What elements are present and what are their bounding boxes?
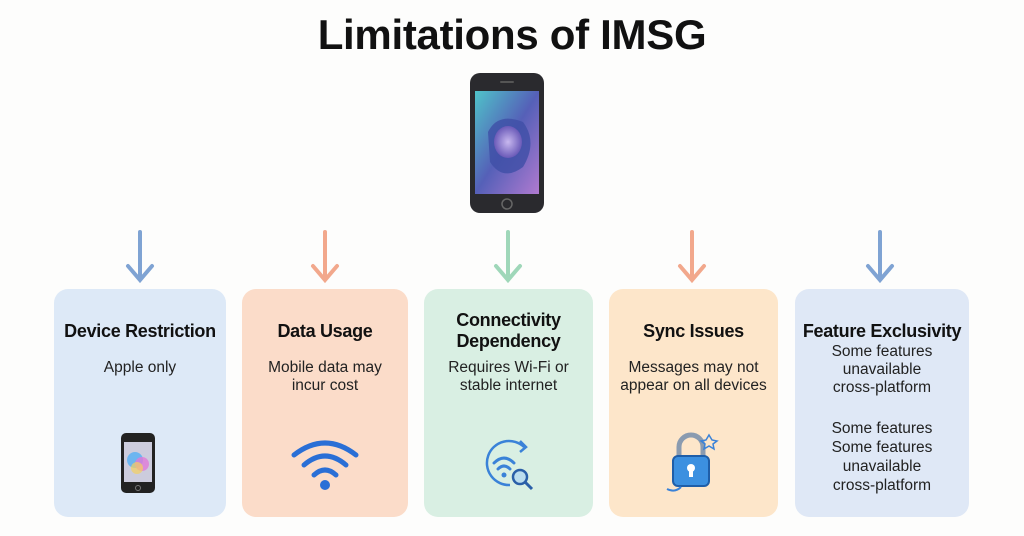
arrow 4 xyxy=(678,230,706,283)
heading: Connectivity xyxy=(456,310,561,330)
text xyxy=(832,343,932,396)
text: stable internet xyxy=(460,377,557,394)
text repeated xyxy=(832,420,932,494)
panel: sync issues xyxy=(609,289,778,517)
icon: padlock xyxy=(666,432,719,492)
heading: Device Restriction xyxy=(64,321,216,341)
panel: device restriction xyxy=(54,289,226,517)
arrow 2 xyxy=(310,230,340,283)
panel: data usage xyxy=(242,289,408,517)
text repeated: unavailable xyxy=(843,458,921,475)
heading: Sync Issues xyxy=(643,321,744,341)
text: unavailable xyxy=(843,361,921,378)
heading: Dependency xyxy=(456,331,561,351)
text: appear on all devices xyxy=(620,377,767,394)
text xyxy=(448,359,569,394)
title: Limitations of IMSG xyxy=(318,11,706,58)
heading: Data Usage xyxy=(277,321,373,341)
heading xyxy=(456,310,561,351)
icon: small phone xyxy=(121,433,155,493)
text: Mobile data may xyxy=(268,359,382,376)
arrow 5 xyxy=(866,230,894,283)
text: Messages may not xyxy=(628,359,759,376)
icon: wifi xyxy=(292,440,358,490)
heading: Feature Exclusivity xyxy=(803,321,961,341)
text: cross-platform xyxy=(833,379,931,396)
text: incur cost xyxy=(292,377,358,394)
text: Requires Wi-Fi or xyxy=(448,359,569,376)
text: Some features xyxy=(832,343,932,360)
text xyxy=(268,359,382,394)
icon: wifi search xyxy=(486,440,533,490)
arrow 3 xyxy=(494,230,522,283)
icon: central phone xyxy=(470,73,544,213)
text: Apple only xyxy=(104,359,176,376)
arrow 1 xyxy=(126,230,154,283)
text repeated: Some features xyxy=(832,420,932,437)
text repeated: Some features xyxy=(832,439,932,456)
text repeated: cross-platform xyxy=(833,477,931,494)
text xyxy=(620,359,767,394)
panel: connectivity dependency xyxy=(424,289,593,517)
panel: feature exclusivity xyxy=(795,289,969,517)
